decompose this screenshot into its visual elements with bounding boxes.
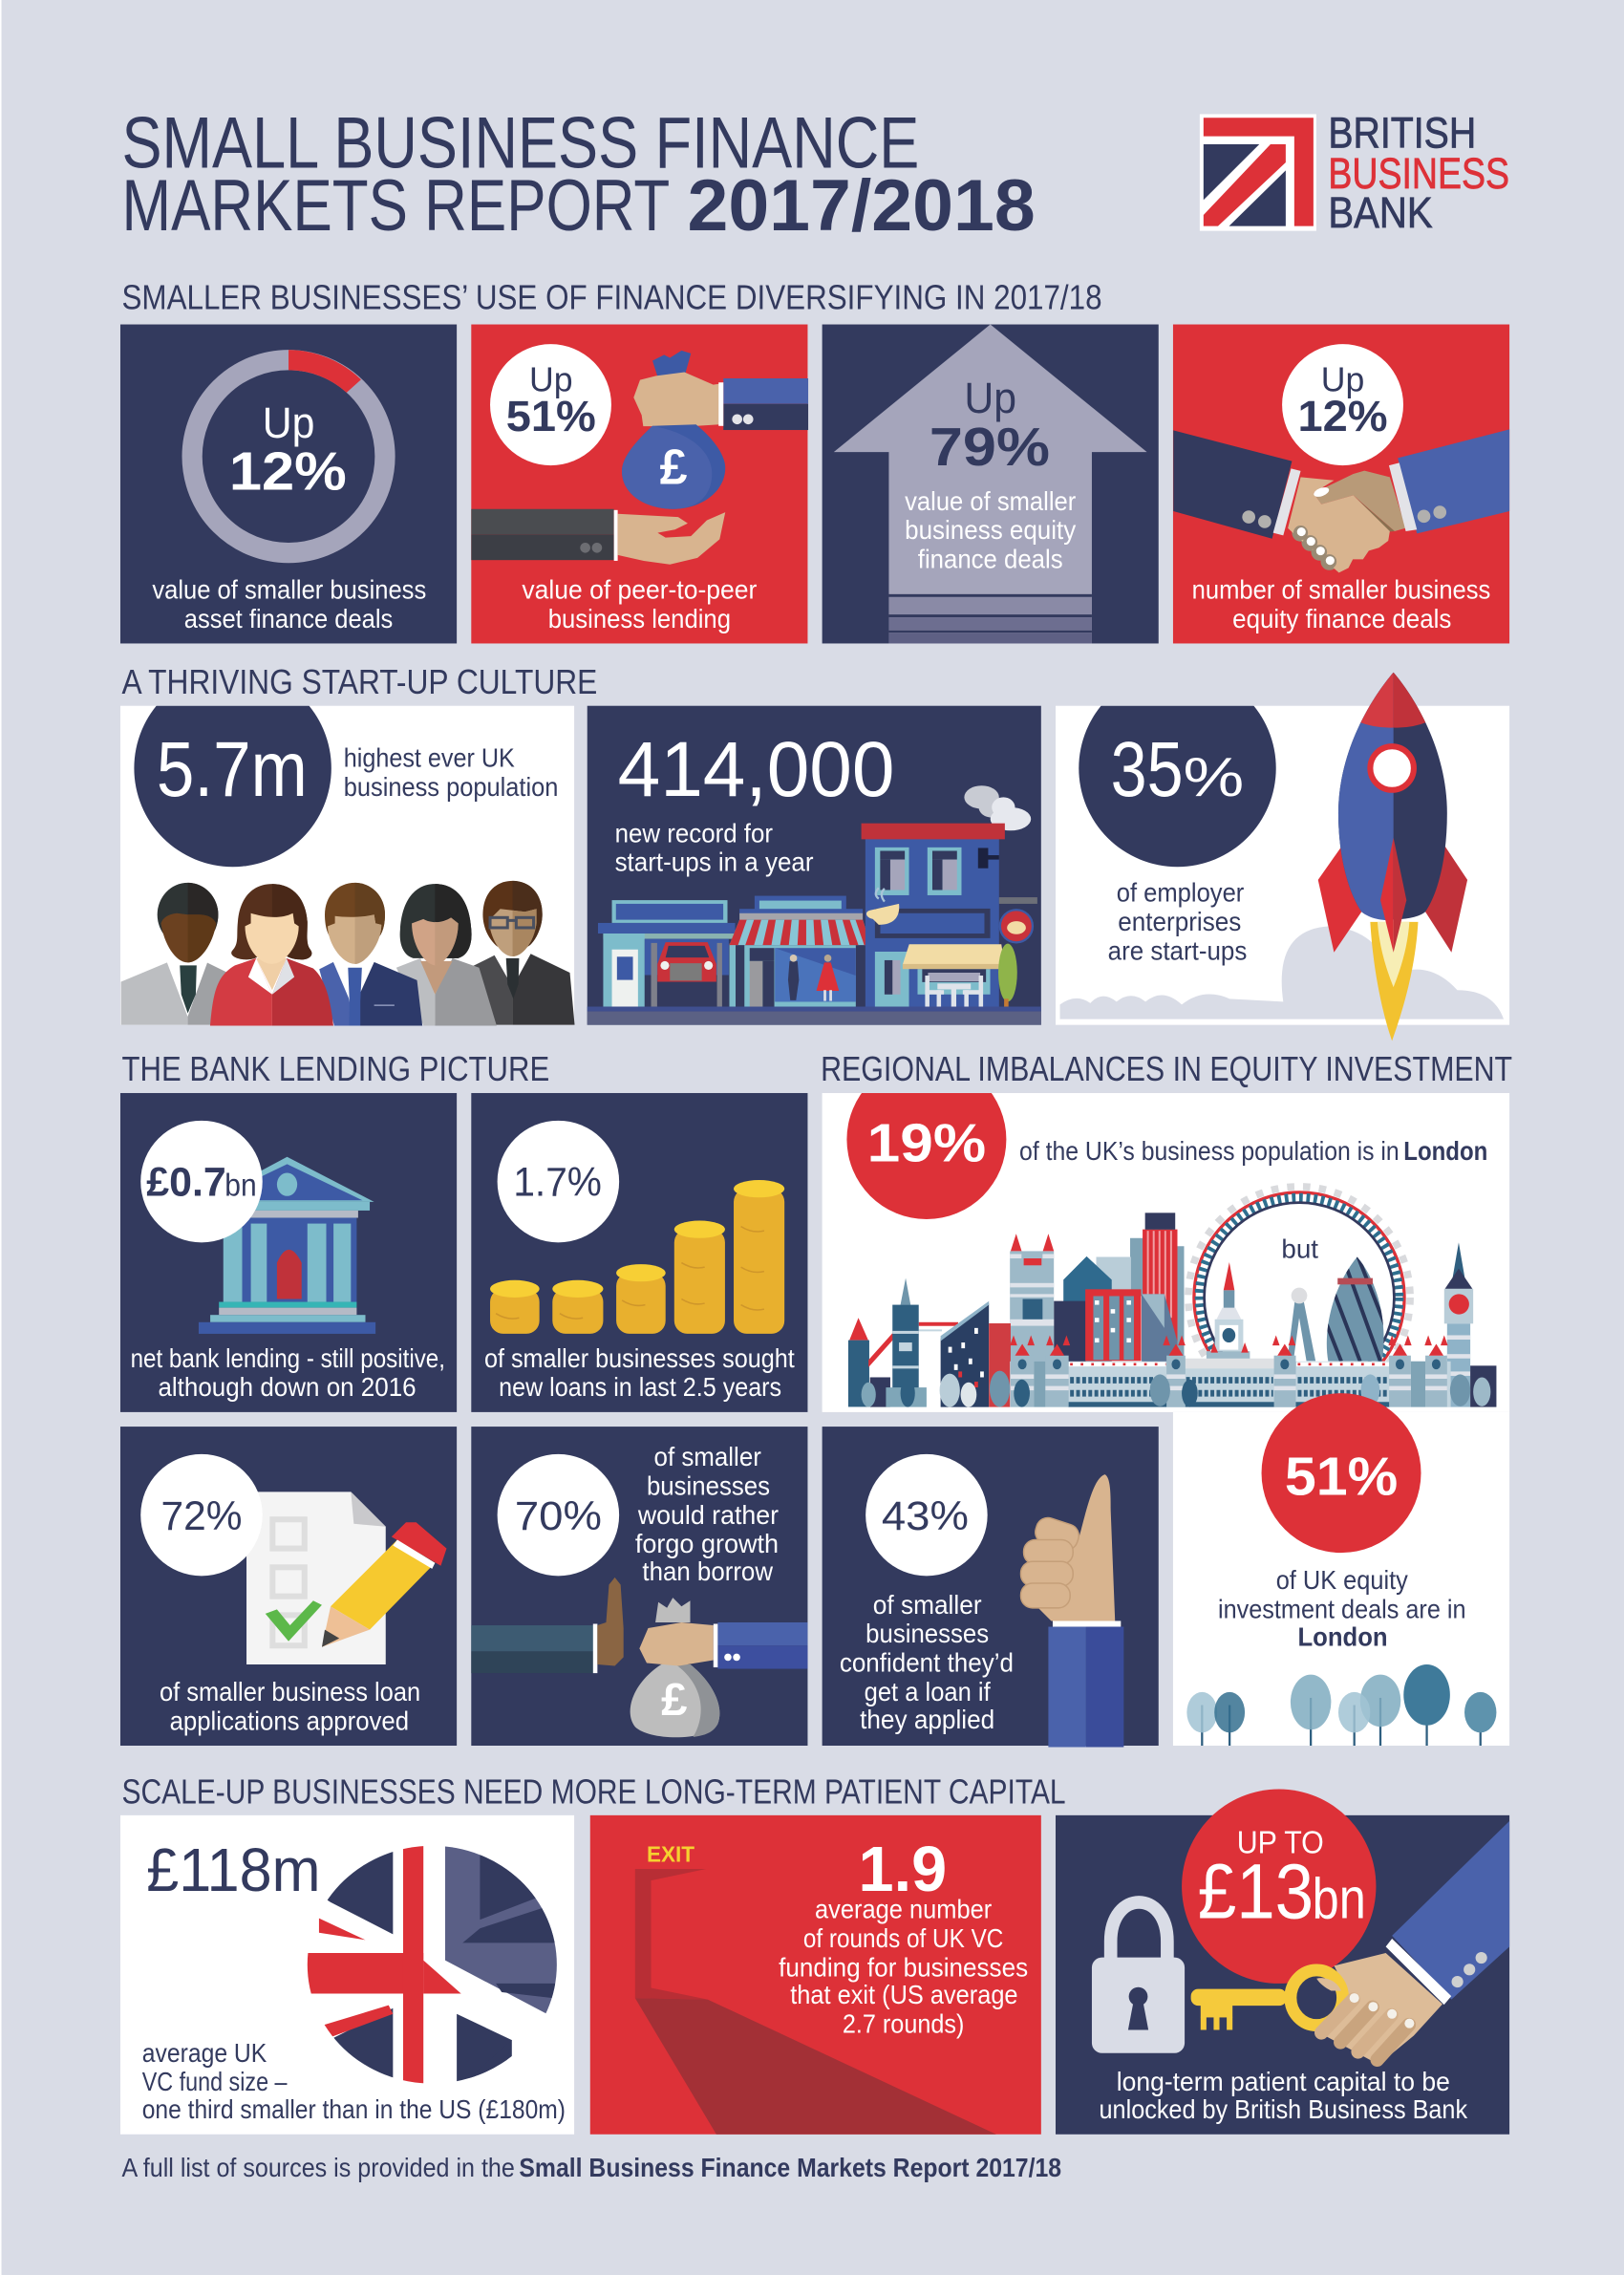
panel: 70% rather forgo growth: than borrow (642, 1556, 774, 1586)
panel: 43% confident: businesses (865, 1619, 989, 1648)
panel: equity value up 79%: 79% (930, 417, 1050, 477)
panel: 35% start-ups: are start-ups (1108, 935, 1247, 965)
panel: 70% rather forgo growth: businesses (647, 1470, 770, 1500)
icon: exit door shadow: EXIT (647, 1841, 694, 1866)
panel: asset finance up 12%: 12% (229, 441, 347, 502)
panel: London business population (823, 1060, 1509, 1412)
heading: bank lending: THE BANK LENDING PICTURE (121, 1049, 549, 1088)
panel: asset finance up 12%: asset finance deals (184, 604, 393, 633)
callout circle: Up (1321, 359, 1364, 398)
person 4 (396, 884, 497, 1026)
logo: British Business Bank: BRITISH (1328, 108, 1476, 157)
panel: patient capital: long-term patient capital to be (1117, 2067, 1450, 2096)
panel: net bank lending: net bank lending - still positive, (131, 1343, 445, 1373)
panel: patient capital (1056, 1790, 1509, 2135)
callout circle (140, 1121, 263, 1242)
title (121, 103, 1036, 247)
panel: 43% confident: confident they’d (840, 1648, 1014, 1678)
person 2 (210, 884, 333, 1026)
circle stat (134, 705, 331, 868)
panel: London business population: London (1403, 1136, 1487, 1166)
icon: high street shops (588, 785, 1041, 1025)
panel: 43% confident: of smaller (873, 1590, 982, 1620)
panel: London business population: 19% (867, 1112, 986, 1172)
callout circle (865, 1454, 988, 1576)
panel: asset finance up 12%: Up (263, 398, 314, 447)
panel: 5.7m business population: highest ever UK (344, 742, 515, 772)
panel: 51% equity deals in London: investment deals are in (1218, 1594, 1466, 1623)
person 3 (319, 883, 422, 1026)
logo: British Business Bank: BANK (1328, 188, 1433, 237)
St Paul's tower (1207, 1262, 1250, 1360)
panel: 72% approved: of smaller business loan (160, 1677, 420, 1706)
panel: VC fund size: one third smaller than in the US (£180m) (142, 2094, 566, 2124)
circle stat (846, 1093, 1007, 1219)
panel: 35% start-ups: of employer (1117, 878, 1244, 908)
icon: hand refusing money bag: £ (661, 1674, 687, 1726)
panel: new loans: of smaller businesses sought (484, 1343, 795, 1373)
panel: patient capital: bn (1313, 1866, 1366, 1931)
Westminster tower (1010, 1234, 1054, 1364)
houses of parliament (862, 1335, 1490, 1407)
panel: 43% confident (823, 1427, 1159, 1748)
chart: coin stacks (490, 1180, 784, 1334)
panel: 414,000 start-ups: new record for (615, 818, 773, 848)
panel: VC fund size: £118m (146, 1835, 320, 1904)
callout circle: 70% (515, 1494, 602, 1539)
clothes shop (729, 896, 870, 1007)
circle stat (1079, 705, 1276, 868)
panel: equity number up 12% (1173, 325, 1509, 643)
callout circle: £0.7 (146, 1161, 226, 1206)
panel: equity value up 79%: Up (964, 374, 1016, 422)
icon: hands with money bag (471, 351, 808, 565)
icon: checklist and pencil (246, 1492, 447, 1664)
callout circle: 51% (506, 392, 596, 440)
panel: equity value up 79%: finance deals (918, 545, 1063, 574)
icon: hand with key (1191, 1821, 1509, 2065)
panel: 35% start-ups: 35 (1111, 726, 1184, 813)
panel: 43% confident: they applied (860, 1705, 994, 1734)
icon: rocket (1318, 668, 1467, 1041)
callout circle: 12% (1297, 392, 1388, 440)
clouds (964, 785, 1031, 830)
panel: rounds of funding (590, 1815, 1041, 2135)
circle stat (1262, 1393, 1421, 1553)
panel: VC fund size: average UK (142, 2038, 267, 2068)
icon: hand refusing money bag (471, 1577, 807, 1737)
left riverside towers and glass block (848, 1278, 1011, 1407)
panel: asset finance up 12%: value of smaller business (152, 574, 426, 604)
panel: 51% equity deals in London: 51% (1285, 1446, 1398, 1506)
panel: 51% equity deals in London (1173, 1393, 1509, 1746)
panel: 70% rather forgo growth (471, 1427, 807, 1746)
panel: 414,000 start-ups: 414,000 (618, 726, 895, 813)
panel: rounds of funding: funding for businesses (779, 1952, 1028, 1982)
title: MARKETS REPORT (121, 165, 670, 247)
panel: equity value up 79%: business equity (905, 515, 1076, 545)
footer: sources: A full list of sources is provided in the (121, 2153, 515, 2182)
title: 2017/2018 (687, 165, 1036, 247)
gherkin (1326, 1257, 1383, 1362)
panel: London business population: of the UK’s business population is in (1019, 1136, 1400, 1166)
panel: 5.7m business population: 5.7m (157, 726, 308, 813)
panel: patient capital: UP TO (1237, 1825, 1324, 1860)
panel: patient capital: £13 (1198, 1849, 1314, 1936)
illustration: London skyline: but (1281, 1234, 1318, 1264)
chart: union flag pie (308, 1846, 557, 2083)
heading: scale-up: SCALE-UP BUSINESSES NEED MORE LONG-TERM PATIENT CAPITAL (121, 1772, 1066, 1812)
title: SMALL BUSINESS FINANCE (121, 103, 919, 184)
heading: finance diversifying: SMALLER BUSINESSES’ USE OF FINANCE DIVERSIFYING IN 2017/18 (121, 278, 1102, 317)
tower with pod (1287, 1288, 1315, 1361)
panel: peer-to-peer up 51%: business lending (548, 604, 731, 633)
panel: equity value up 79%: value of smaller (905, 486, 1076, 516)
callout circle: Up (529, 359, 573, 398)
panel: 72% approved: applications approved (170, 1706, 409, 1735)
heading: start-up culture: A THRIVING START-UP CULTURE (121, 662, 597, 701)
callout circle (498, 1121, 619, 1242)
circle stat (1182, 1790, 1376, 1984)
panel: equity number up 12%: equity finance deals (1232, 604, 1451, 633)
icon: hands with money bag: £ (660, 439, 688, 494)
panel: patient capital: unlocked by British Business Bank (1100, 2094, 1468, 2124)
panel: new loans: new loans in last 2.5 years (499, 1372, 781, 1402)
panel: 5.7m business population: business population (344, 772, 558, 802)
panel: equity number up 12%: number of smaller business (1192, 574, 1490, 604)
footer: sources (121, 2153, 1061, 2182)
panel: peer-to-peer up 51% (471, 325, 808, 643)
blue cafe building (862, 824, 1037, 1007)
skyline trees (862, 1371, 1490, 1407)
panel: 5.7m business population (120, 705, 575, 1026)
panel: 414,000 start-ups: start-ups in a year (615, 848, 814, 877)
panel: 35% start-ups (1056, 668, 1509, 1041)
callout circle: bn (224, 1169, 257, 1204)
panel: rounds of funding: average number (815, 1895, 992, 1924)
panel: net bank lending: although down on 2016 (158, 1372, 417, 1402)
callout circle: 1.7% (513, 1161, 602, 1206)
panel: new loans (471, 1093, 807, 1412)
chart: donut ring (192, 350, 385, 553)
panel: 51% equity deals in London: London (1297, 1621, 1388, 1651)
panel: rounds of funding: that exit (US average (790, 1980, 1018, 2009)
icon: trees (1186, 1664, 1496, 1746)
panel: 43% confident: get a loan if (865, 1677, 991, 1706)
logo: British Business Bank (1200, 108, 1509, 237)
logo: British Business Bank: BUSINESS (1328, 149, 1509, 198)
panel: 72% approved (120, 1427, 457, 1746)
callout circle (498, 1454, 619, 1576)
panel: 35% start-ups: % (1184, 747, 1244, 808)
callout circle: 43% (882, 1494, 969, 1539)
panel: VC fund size: VC fund size – (142, 2067, 288, 2096)
footer: sources: Small Business Finance Markets Report 2017/18 (519, 2153, 1061, 2182)
panel: 70% rather forgo growth: would rather (637, 1500, 779, 1530)
panel: rounds of funding: 2.7 rounds) (843, 2009, 964, 2039)
Big Ben (1444, 1242, 1496, 1407)
icon: up arrow (834, 325, 1147, 643)
panel: asset finance up 12% (120, 325, 457, 643)
panel: 35% start-ups: enterprises (1118, 907, 1241, 936)
flag slice (445, 1846, 557, 2014)
person 5 (471, 881, 575, 1025)
panel: rounds of funding: of rounds of UK VC (803, 1923, 1003, 1953)
icon: cloud (1060, 926, 1504, 1019)
icon: handshake (1173, 429, 1509, 572)
person 1 (121, 883, 227, 1025)
icon: group of business people (121, 881, 575, 1026)
garage shop (598, 900, 736, 1007)
icon: bank building (199, 1157, 375, 1334)
callout circle: 72% (160, 1494, 242, 1539)
panel: 70% rather forgo growth: forgo growth (635, 1529, 779, 1558)
callout circle (140, 1454, 263, 1576)
panel: VC fund size (120, 1815, 574, 2135)
panel: 414,000 start-ups (588, 706, 1041, 1025)
parliament towers (1010, 1335, 1448, 1407)
panel: peer-to-peer up 51%: value of peer-to-peer (522, 574, 757, 604)
panel: equity value up 79% (823, 325, 1159, 643)
illustration: London skyline (848, 1187, 1496, 1408)
panel: rounds of funding: 1.9 (859, 1835, 947, 1905)
callout circle (1282, 344, 1403, 465)
callout circle (490, 344, 611, 465)
icon: exit door shadow (635, 1841, 996, 2135)
panel: net bank lending (120, 1093, 457, 1412)
panel: 51% equity deals in London: of UK equity (1276, 1565, 1408, 1595)
street (588, 1007, 1041, 1025)
city towers (1054, 1213, 1184, 1364)
icon: padlock (1092, 1902, 1185, 2053)
panel: 70% rather forgo growth: of smaller (654, 1442, 761, 1471)
London eye (1185, 1183, 1414, 1362)
icon: thumbs up (1021, 1474, 1123, 1748)
